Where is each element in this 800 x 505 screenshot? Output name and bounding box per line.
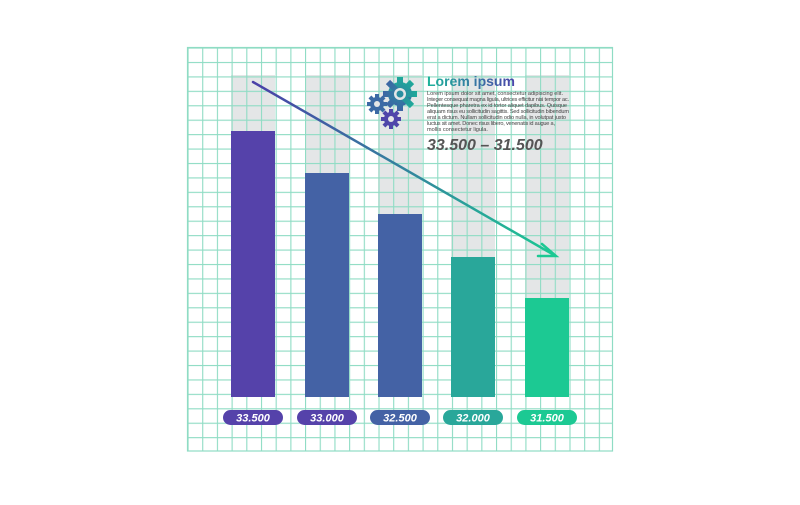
value labels: 32.000 [456, 412, 491, 424]
value labels: 32.500 [383, 412, 418, 424]
range numbers: 33.500 – 31.500 [427, 137, 543, 154]
value labels: 33.000 [310, 412, 345, 424]
text block: luctus sit amet. Donec risus libero, venenatis id augue a, [427, 121, 555, 127]
icon: gears [367, 77, 417, 129]
grid [187, 47, 613, 451]
bar chart [231, 131, 569, 397]
text block: aliquam risus eu sollicitudin sagittis. Sed sollicitudin bibendum [427, 109, 569, 115]
text block: Lorem ipsum dolor sit amet, consectetur adipiscing elit. [427, 91, 563, 97]
arrow: trend [253, 82, 556, 256]
value labels [223, 410, 577, 425]
text block: Pellentesque pharetra ex id tortor aliquet dapibus. Quisque [427, 103, 567, 109]
value labels: 31.500 [530, 412, 565, 424]
gray bar backgrounds [231, 75, 569, 397]
text block: erat a dictum. Nullam sollicitudin odio nulla, in volutpat justo [427, 115, 566, 121]
text block: Integer consequat magna ligula, ultrices efficitur nisi tempor ac. [427, 97, 569, 103]
value labels: 33.500 [236, 412, 271, 424]
title: Lorem ipsum [427, 73, 515, 89]
text block: mollis consectetur ligula. [427, 127, 488, 133]
text block [427, 91, 569, 133]
